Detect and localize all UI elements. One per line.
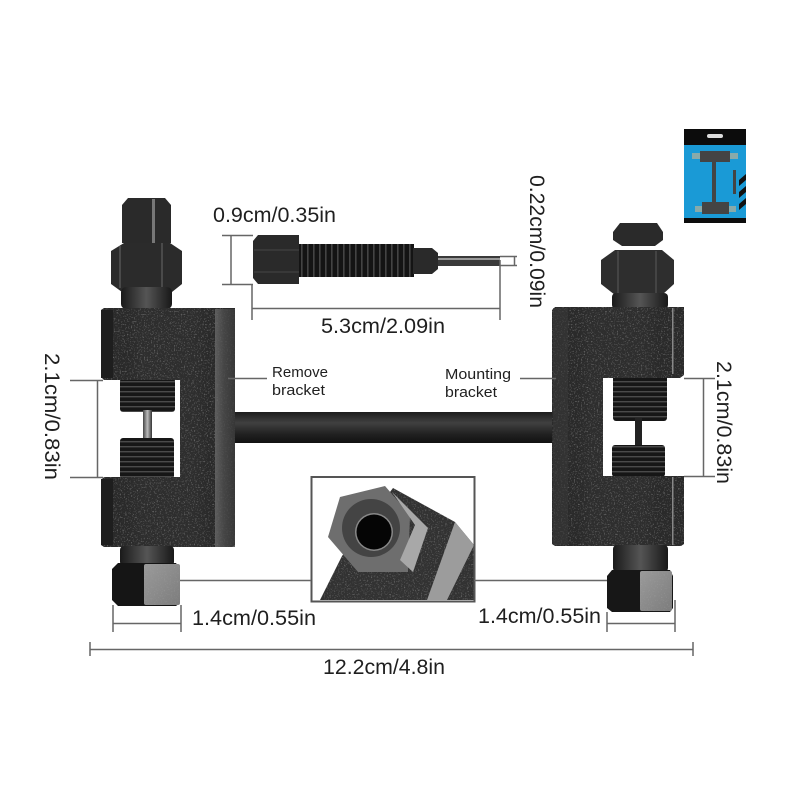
left top collar	[121, 287, 172, 309]
inset bracket plate	[320, 488, 474, 600]
label: mounting bracket: bracket	[445, 384, 498, 401]
left bottom collar	[120, 546, 174, 566]
connecting rod	[232, 412, 554, 443]
screw threads	[298, 244, 414, 277]
leader lines from nuts to inset	[180, 580, 607, 582]
screw hex head	[253, 235, 299, 284]
dimension: 0.9cm head width: 0.9cm/0.35in	[213, 204, 336, 227]
dimension: 5.3cm screw length	[252, 260, 500, 338]
left tool: remove bracket	[101, 198, 235, 606]
label: mounting bracket	[445, 366, 556, 401]
right top bolt head	[613, 223, 663, 246]
left bracket body	[101, 308, 235, 547]
inset hex nut	[328, 486, 410, 572]
dimension: left 1.4cm nut: 1.4cm/0.55in	[192, 607, 316, 630]
label: mounting bracket: Mounting	[445, 366, 511, 383]
right lower threads	[612, 445, 665, 477]
right tool: mounting bracket	[552, 223, 684, 612]
right bottom hex nut	[607, 570, 673, 612]
package black footer	[684, 218, 746, 223]
dimension: 12.2cm overall width	[90, 642, 693, 679]
dimension: right 2.1cm gap	[684, 361, 735, 484]
left bottom hex nut	[112, 563, 180, 606]
dimension: right 2.1cm gap: 2.1cm/0.83in	[712, 361, 735, 484]
dimension: left 2.1cm gap	[40, 353, 103, 480]
inset frame	[312, 477, 474, 602]
package product	[692, 151, 738, 214]
package thumbnail	[684, 129, 746, 223]
left pin	[143, 410, 152, 440]
left upper threads	[120, 378, 175, 412]
inset bright bracket edge	[427, 522, 474, 600]
dimension: right 1.4cm nut	[478, 600, 675, 632]
right bottom collar	[613, 545, 668, 572]
dimension: 12.2cm overall width: 12.2cm/4.8in	[323, 656, 445, 679]
inset socket bore	[342, 499, 400, 557]
dimension: 5.3cm screw length: 5.3cm/2.09in	[321, 315, 445, 338]
dimension: left 1.4cm nut	[113, 605, 316, 632]
package hang hole	[707, 134, 723, 138]
right bracket body	[552, 307, 684, 546]
inset photo: hex socket close-up	[312, 477, 474, 602]
left top hex nut	[111, 243, 182, 292]
dimension: 0.22cm tip width: 0.22cm/0.09in	[525, 175, 548, 308]
left lower threads	[120, 438, 174, 479]
right top collar	[612, 293, 668, 309]
dimension: left 2.1cm gap: 2.1cm/0.83in	[40, 353, 63, 480]
extractor screw	[253, 235, 500, 284]
right top hex nut	[601, 250, 674, 295]
package black header	[684, 129, 746, 145]
label: remove bracket: bracket	[272, 382, 326, 399]
dimension: 0.9cm head width	[213, 204, 336, 285]
screw shoulder	[413, 248, 438, 274]
right pin	[635, 418, 642, 447]
dimension: 0.22cm tip width	[500, 175, 548, 308]
left top hex bolt head	[122, 198, 171, 243]
package hazard stripes	[739, 174, 746, 210]
label: remove bracket	[228, 364, 328, 399]
label: remove bracket: Remove	[272, 364, 328, 381]
right upper threads	[613, 375, 667, 421]
inset nut side facet	[392, 492, 428, 572]
screw tip pin	[438, 256, 500, 266]
dimension: right 1.4cm nut: 1.4cm/0.55in	[478, 605, 601, 628]
